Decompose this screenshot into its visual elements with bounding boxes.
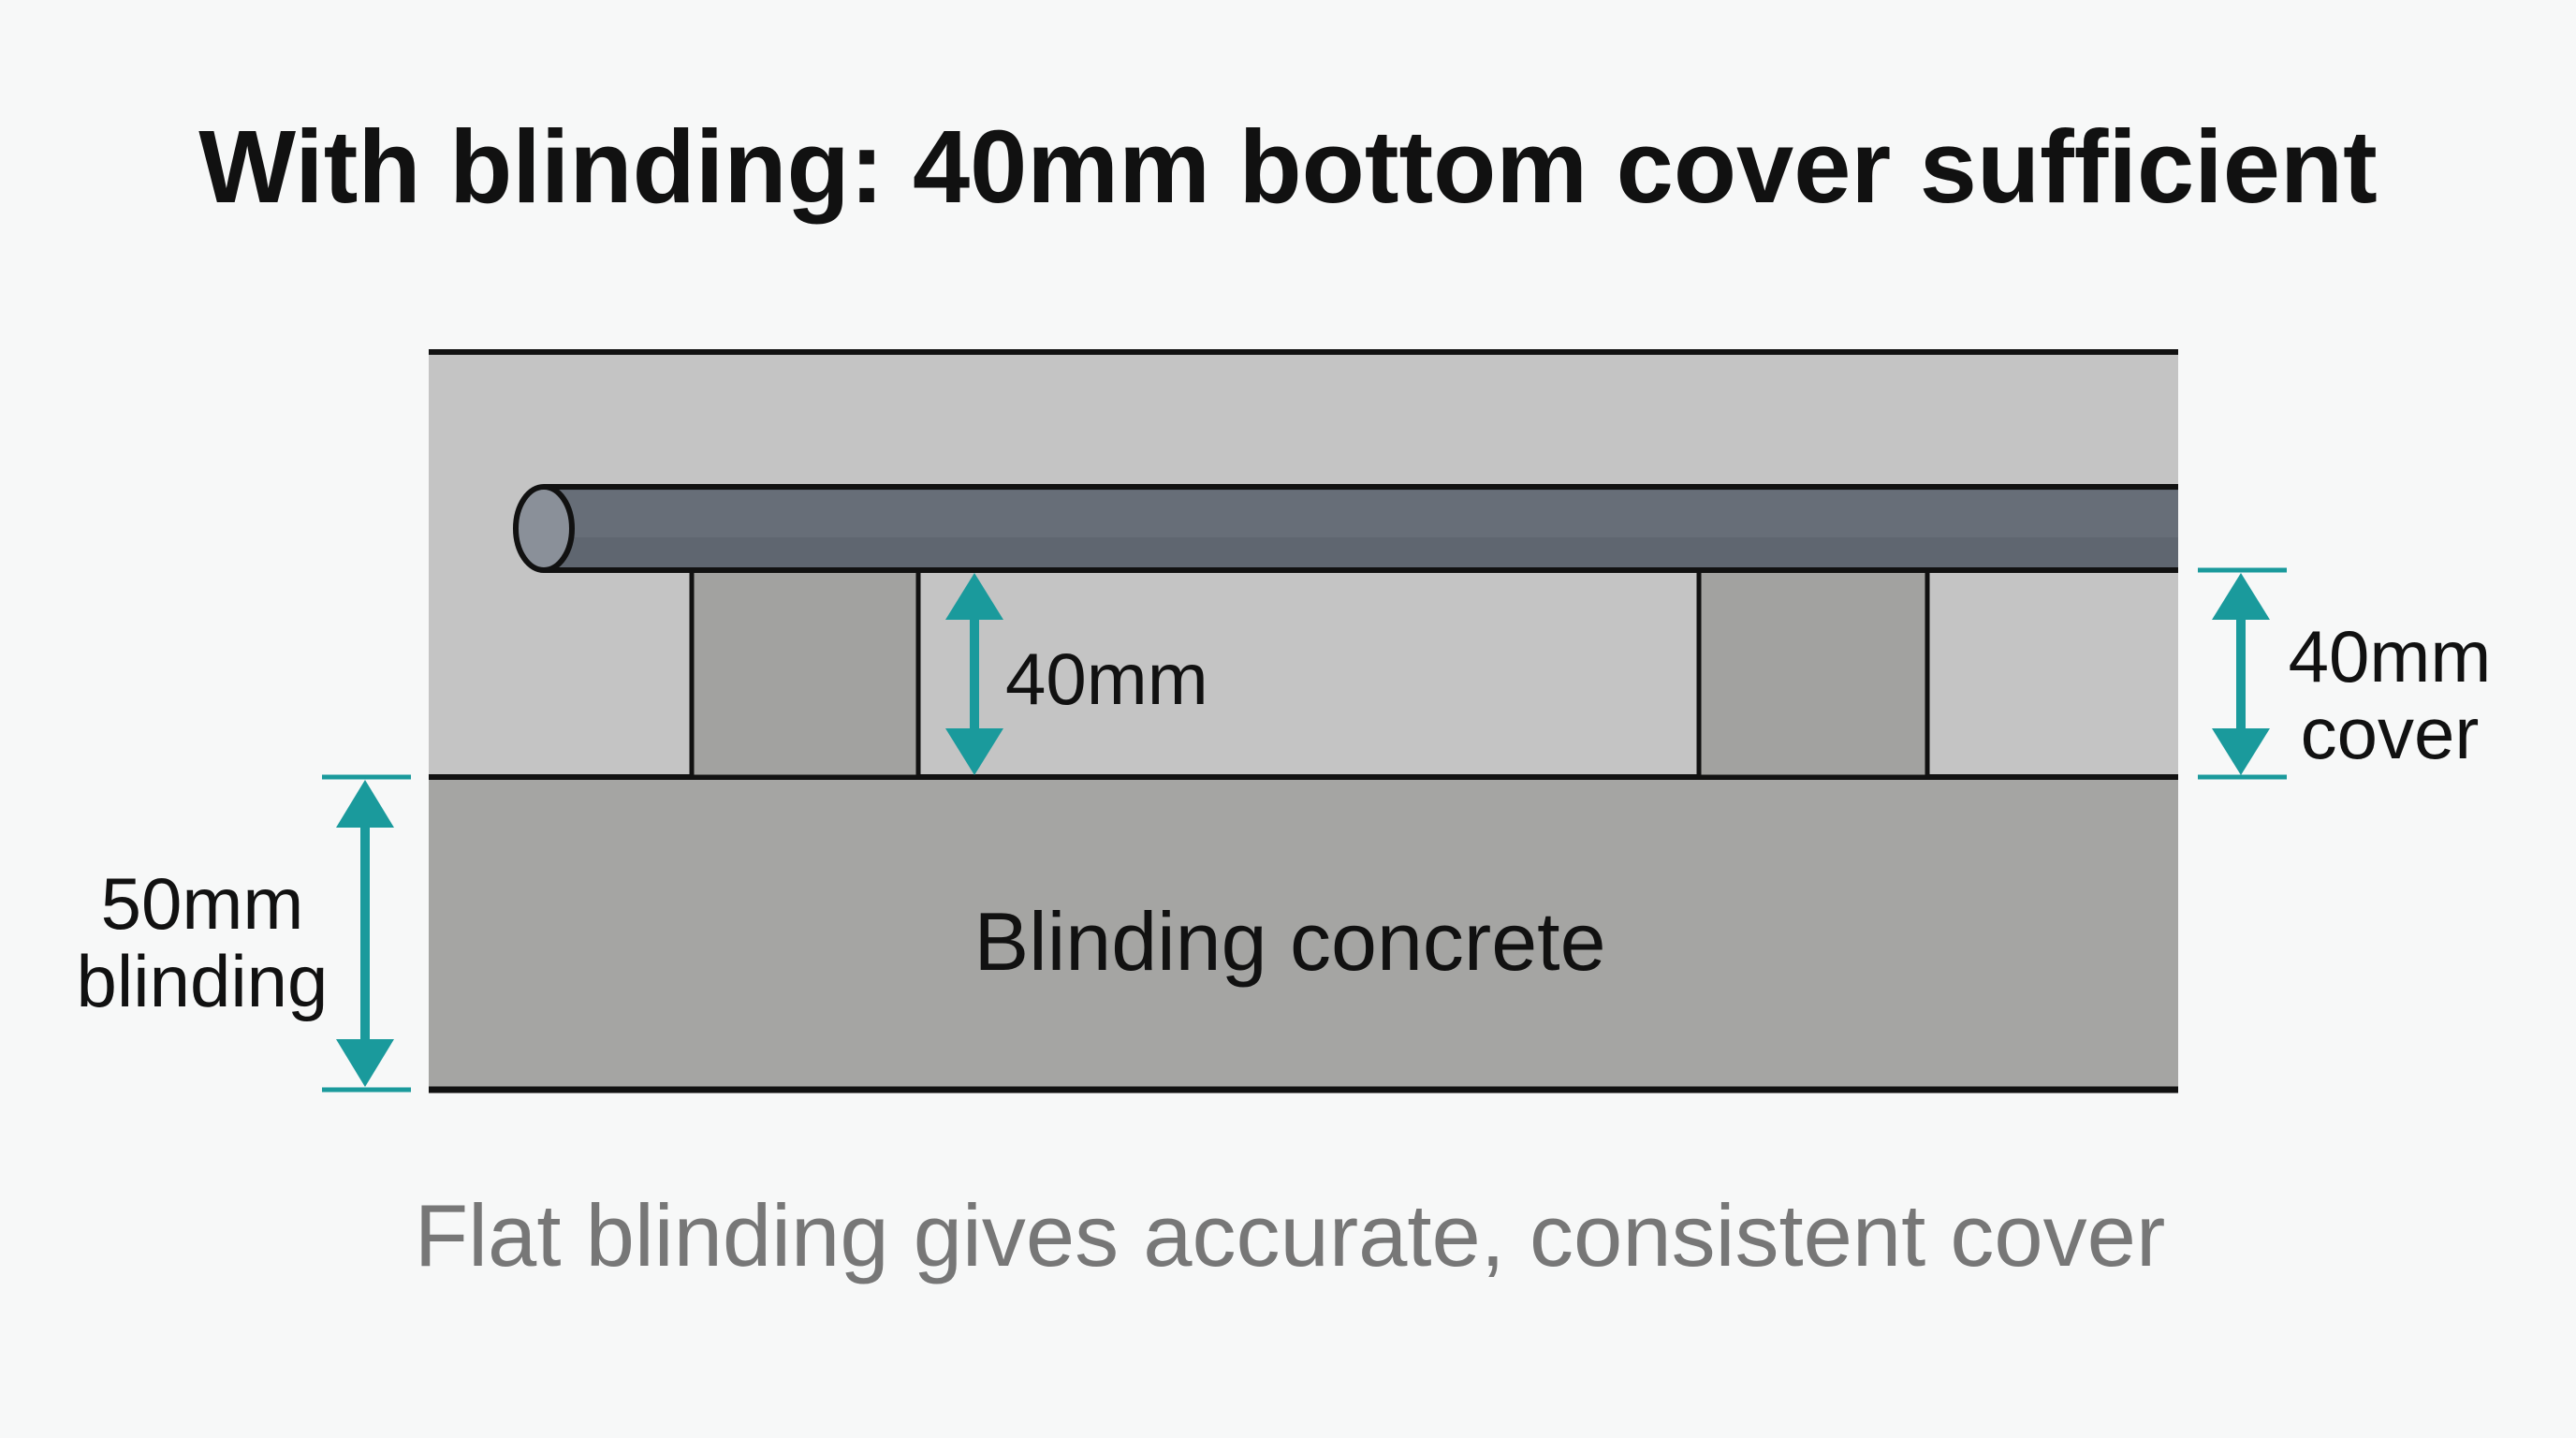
title: With blinding: 40mm bottom cover sufficient: [198, 110, 2378, 225]
rebar: [516, 487, 2178, 570]
arrow: 40mm between spacers: [945, 573, 1003, 775]
spacer right: [1699, 570, 1927, 777]
label: 50mm blinding: 50mm: [101, 862, 303, 945]
subtitle: Flat blinding gives accurate, consistent cover: [415, 1186, 2165, 1284]
panel: cross-section diagram: [429, 352, 2178, 1090]
arrow: 50mm blinding left: [322, 777, 411, 1090]
label: 40mm: 40mm: [1005, 638, 1208, 720]
label: 50mm blinding: blinding: [77, 940, 328, 1022]
label: 40mm cover: 40mm: [2289, 615, 2491, 697]
arrow: 40mm cover right: [2198, 570, 2287, 777]
label: Blinding concrete: Blinding concrete: [973, 895, 1606, 988]
label: 40mm cover: cover: [2301, 692, 2479, 774]
slab concrete: [429, 352, 2178, 777]
label: 50mm blinding: [77, 862, 328, 1022]
spacer left: [692, 570, 918, 777]
blinding concrete layer: [429, 777, 2178, 1090]
label: 40mm cover: [2289, 615, 2491, 774]
